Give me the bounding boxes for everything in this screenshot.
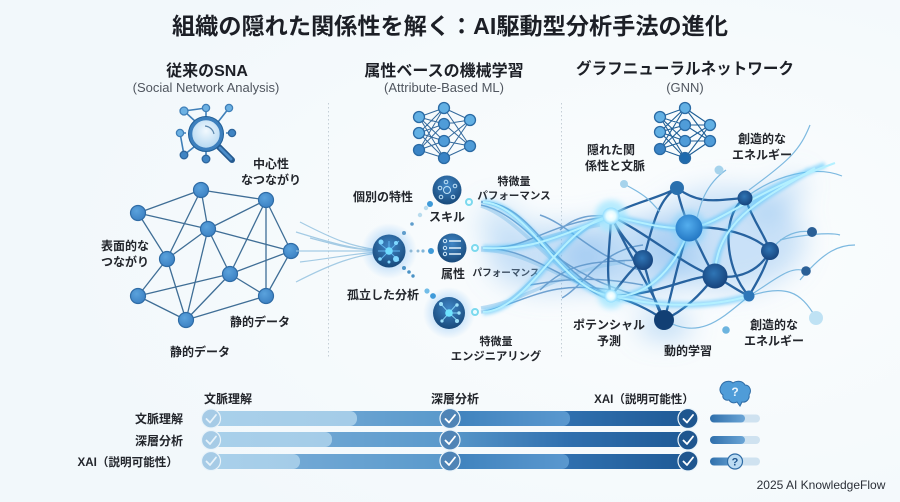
heading: attribute ML xyxy=(364,61,524,95)
check markers xyxy=(202,408,698,471)
label: potential prediction: 予測 xyxy=(597,333,621,348)
network graph: static SNA xyxy=(130,182,298,328)
label: feature performance: パフォーマンス xyxy=(477,190,551,202)
label: creative energy bottom: エネルギー xyxy=(744,334,804,348)
heading: attribute ML: (Attribute-Based ML) xyxy=(384,80,504,95)
icon: question mark xyxy=(728,454,742,469)
heading: SNA: 従来のSNA xyxy=(166,62,248,80)
label: surface ties: 表面的な xyxy=(101,238,149,253)
column dividers xyxy=(328,103,562,358)
credit: 2025 AI KnowledgeFlow xyxy=(757,478,886,492)
label: attribute: 属性 xyxy=(441,266,465,281)
label: surface ties: つながり xyxy=(101,254,149,269)
column heads: XAI（説明可能性） xyxy=(594,392,694,406)
icon: skill xyxy=(432,176,462,204)
bar row 2 xyxy=(212,432,688,447)
heading: SNA: (Social Network Analysis) xyxy=(133,80,279,95)
title: 組織の隠れた関係性を解く：AI駆動型分析手法の進化 xyxy=(172,13,728,39)
icon: attribute list xyxy=(438,234,466,262)
panel: attribute ML xyxy=(347,61,551,363)
row labels xyxy=(78,411,183,469)
strands: pale band xyxy=(481,202,625,312)
panel: GNN xyxy=(466,59,855,358)
row labels: XAI（説明可能性） xyxy=(78,455,178,469)
icon: magnifier network xyxy=(176,104,236,163)
strands: muted blue xyxy=(481,202,655,312)
heading: GNN: グラフニューラルネットワーク xyxy=(576,59,794,78)
label: creative energy bottom: 創造的な xyxy=(750,317,798,332)
label: feature engineering: 特微量 xyxy=(480,334,512,348)
label: static data bottom: 静的データ xyxy=(170,344,230,359)
label: hidden relationships: 隠れた関 xyxy=(587,143,635,157)
glow cloud xyxy=(478,172,805,339)
label: individual traits: 個別の特性 xyxy=(353,189,413,204)
icon: neural net GNN xyxy=(654,102,716,164)
label: dynamic learning: 動的学習 xyxy=(664,343,712,358)
label: feature performance: 特微量 xyxy=(498,174,530,188)
label: creative energy top: エネルギー xyxy=(732,148,792,162)
label: potential prediction: ポテンシャル xyxy=(573,318,645,332)
column heads xyxy=(204,391,694,406)
icon: feature engineering xyxy=(423,287,475,339)
row labels: 文脈理解 xyxy=(135,411,183,426)
dotted connectors xyxy=(402,201,436,299)
heading: attribute ML: 属性ベースの機械学習 xyxy=(364,61,524,80)
flowing strands xyxy=(481,125,855,328)
label: hidden relationships: 係性と文脈 xyxy=(585,158,645,173)
strands: thin light xyxy=(624,125,855,328)
label: isolated analysis: 孤立した分析 xyxy=(347,287,419,302)
bar row 3 xyxy=(212,454,688,469)
label: skill: スキル xyxy=(429,210,465,224)
small ring nodes xyxy=(466,199,478,315)
hub: isolated analysis xyxy=(361,223,417,279)
label: feature engineering: エンジニアリング xyxy=(451,349,542,363)
mini bars xyxy=(710,414,760,466)
label: centrality: 中心性 xyxy=(253,156,289,171)
heading: SNA xyxy=(133,62,279,95)
strands: bright cyan xyxy=(483,165,825,312)
icon: brain question: ? xyxy=(731,385,739,399)
label: creative energy top: 創造的な xyxy=(738,131,786,146)
icon: brain question xyxy=(720,381,750,406)
flow: SNA into hub xyxy=(296,222,378,282)
icon: neural net xyxy=(414,102,476,164)
icon: question mark: ? xyxy=(732,456,739,468)
label: performance: パフォーマンス xyxy=(473,268,539,279)
column heads: 文脈理解 xyxy=(204,391,252,406)
strands: dark network xyxy=(608,188,770,320)
row labels: 深層分析 xyxy=(135,433,183,448)
label: centrality: なつながり xyxy=(241,172,301,187)
bar row 1 xyxy=(212,411,688,426)
panel: SNA xyxy=(101,62,301,359)
heading: GNN: (GNN) xyxy=(666,80,704,95)
label: static data right: 静的データ xyxy=(230,314,290,329)
heading: GNN xyxy=(576,59,794,95)
column heads: 深層分析 xyxy=(431,391,479,406)
panel: comparison bars xyxy=(78,381,886,492)
GNN nodes xyxy=(595,166,823,334)
